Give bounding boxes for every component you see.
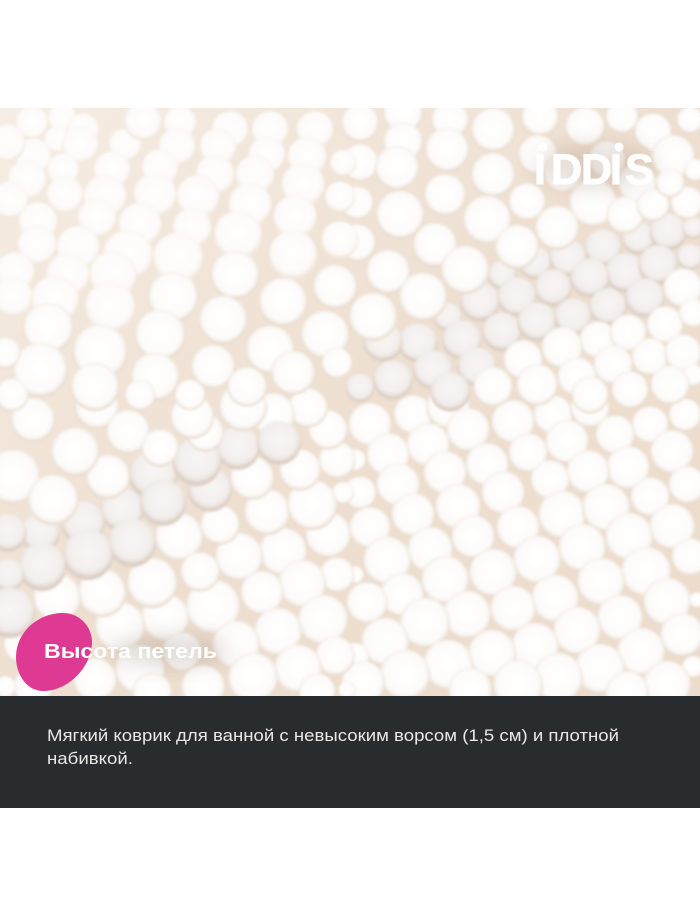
photo: chenille bath mat texture [0,93,700,715]
icon: pink blob behind heading [16,613,92,691]
body text: набивкой. [47,749,133,768]
logo: IDDIS: I [610,146,622,194]
logo: IDDIS [534,142,655,194]
logo: IDDIS: S [625,146,654,194]
logo: IDDIS: D [551,146,582,194]
logo: IDDIS: ® [648,143,655,153]
body text: Мягкий коврик для ванной с невысоким ворсом (1,5 см) и плотной [47,726,619,745]
logo: IDDIS: I [534,146,546,194]
heading: Высота петель [44,641,217,663]
logo: IDDIS: D [581,146,612,194]
dark caption panel [0,696,700,808]
body text [47,726,619,768]
